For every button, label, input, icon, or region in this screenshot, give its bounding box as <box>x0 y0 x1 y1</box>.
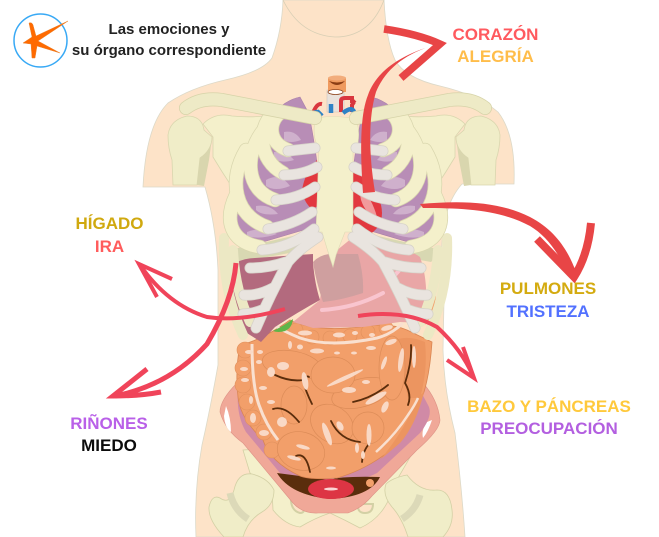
small orange bulb <box>366 479 374 487</box>
label: bazo pancreas preocupacion: BAZO Y PÁNCREAS <box>467 397 631 416</box>
diaphragm <box>228 232 443 262</box>
intestinal loops <box>260 336 405 476</box>
spleen patch <box>407 296 436 325</box>
label: higado ira: HÍGADO <box>76 214 144 233</box>
arrow: rinones <box>113 263 236 396</box>
label: pulmones tristeza <box>500 279 596 321</box>
label: higado ira <box>76 214 144 256</box>
ribs right <box>353 113 447 335</box>
pelvic holes <box>291 501 373 513</box>
colon scallops <box>235 321 393 458</box>
ribs left <box>224 113 318 335</box>
label: bazo pancreas preocupacion: PREOCUPACIÓN <box>480 419 618 438</box>
body silhouette <box>143 0 514 537</box>
sternum <box>314 116 359 267</box>
title: Las emociones y <box>109 21 230 38</box>
logo <box>14 14 68 67</box>
neck line <box>283 0 384 37</box>
clavicle left <box>186 99 315 118</box>
arrow: bazo <box>358 314 474 378</box>
descending colon <box>380 338 426 460</box>
intestinal clefts <box>273 345 411 472</box>
mesentery pink <box>238 390 430 483</box>
clavicle right <box>356 99 485 118</box>
bladder <box>308 479 354 499</box>
heart <box>302 160 382 236</box>
pelvis bones <box>209 440 452 537</box>
pelvic cavity <box>277 473 380 499</box>
lung left <box>231 97 318 243</box>
intestinal highlights <box>240 324 416 470</box>
trachea and vessels <box>312 76 355 116</box>
label: corazon alegria: ALEGRÍA <box>457 47 534 66</box>
peritoneum salmon <box>220 383 440 513</box>
intestines <box>235 320 432 479</box>
title: su órgano correspondiente <box>72 42 266 59</box>
label: pulmones tristeza: TRISTEZA <box>506 302 590 321</box>
stomach and pancreas pink area <box>293 238 426 328</box>
gallbladder <box>273 319 293 332</box>
label: bazo pancreas preocupacion <box>467 397 631 438</box>
label: corazon alegria: CORAZÓN <box>453 25 538 44</box>
label: rinones miedo <box>70 413 148 455</box>
arrow: pulmones <box>420 202 591 277</box>
label: higado ira: IRA <box>95 237 124 256</box>
shoulder bones left <box>168 115 270 187</box>
label: rinones miedo: MIEDO <box>81 436 137 455</box>
label: rinones miedo: RIÑONES <box>70 413 148 433</box>
title <box>72 21 266 59</box>
peritoneum highlights <box>224 406 432 438</box>
descending stripe <box>376 398 418 452</box>
label: corazon alegria <box>453 25 538 66</box>
liver <box>233 254 320 342</box>
shoulder bones right <box>398 115 500 187</box>
arrow: corazon <box>361 29 442 193</box>
pelvis shading <box>230 493 420 519</box>
lung right <box>353 97 440 243</box>
arrow: higado <box>139 264 285 318</box>
transverse colon stripe <box>270 323 403 343</box>
stomach <box>313 254 363 302</box>
ascending colon stripe <box>252 344 278 440</box>
stomach highlights <box>322 265 404 310</box>
label: pulmones tristeza: PULMONES <box>500 279 596 298</box>
